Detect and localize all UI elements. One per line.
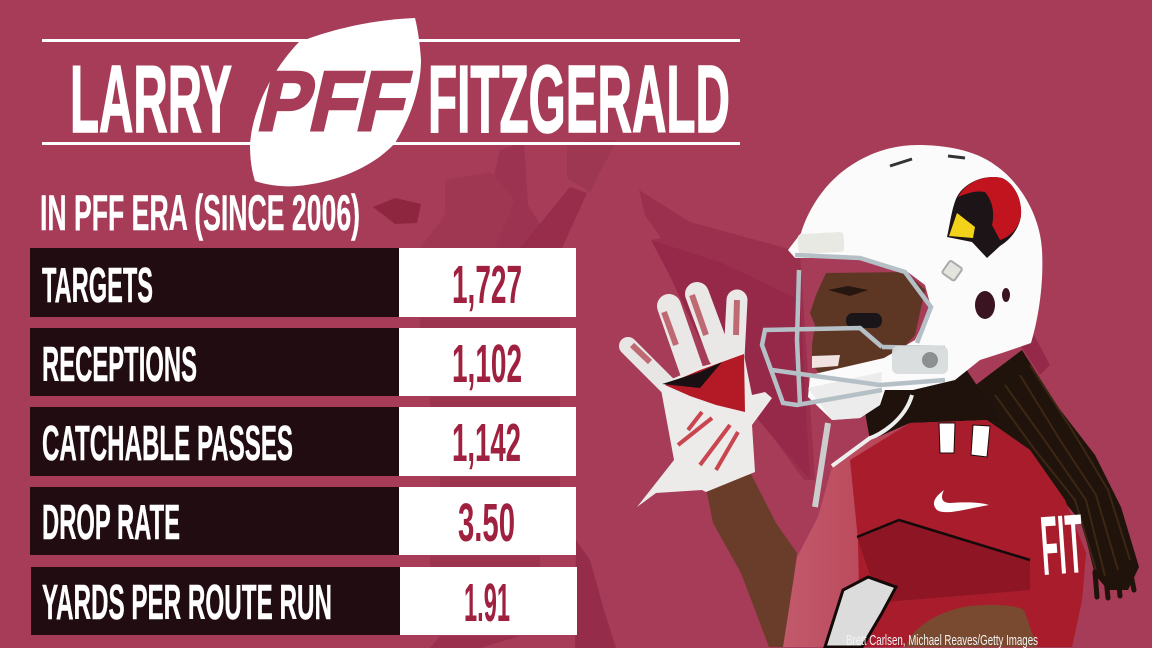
jaw pad xyxy=(808,372,882,420)
jersey seam xyxy=(857,520,1030,560)
mouth xyxy=(812,355,840,368)
stat row: yards per route run: YARDS PER ROUTE RUN xyxy=(42,576,332,630)
stat row: receptions xyxy=(30,328,576,396)
nike swoosh xyxy=(934,490,989,512)
bicep xyxy=(906,605,1037,647)
jersey xyxy=(783,420,1086,647)
forearm xyxy=(706,474,797,647)
facemask clip xyxy=(892,346,948,374)
subtitle: IN PFF ERA (SINCE 2006) xyxy=(40,185,360,241)
stat row: drop rate: 3.50 xyxy=(458,493,515,553)
helmet shell xyxy=(788,145,1042,420)
facemask xyxy=(762,255,945,405)
background wing logo xyxy=(639,190,1050,480)
helmet vents and snap xyxy=(890,156,1010,319)
jersey body red xyxy=(850,420,1086,647)
glove xyxy=(628,294,772,507)
stat row: targets: TARGETS xyxy=(42,259,153,313)
stat row: receptions: RECEPTIONS xyxy=(42,338,197,392)
text: LARRY xyxy=(70,46,232,153)
stat row: yards per route run: 1.91 xyxy=(464,573,510,633)
PFF football logo xyxy=(250,18,421,186)
stat row: targets: 1,727 xyxy=(452,255,522,315)
eye black xyxy=(846,313,882,328)
face xyxy=(810,272,925,385)
helmet front bumper xyxy=(798,232,844,254)
stat row: drop rate xyxy=(30,487,576,555)
title rule top xyxy=(42,39,740,42)
helmet logo xyxy=(947,177,1021,258)
text: FITZGERALD xyxy=(428,46,730,153)
sleeve name: FIT xyxy=(1038,498,1086,594)
neck xyxy=(860,360,1000,440)
stat row: drop rate: DROP RATE xyxy=(42,496,180,550)
stat row: receptions: 1,102 xyxy=(452,334,522,394)
sleeve shading xyxy=(857,520,1030,602)
hair xyxy=(973,350,1139,598)
undershirt panel xyxy=(825,577,896,647)
title rule bottom xyxy=(42,142,740,145)
PFF football logo: PFF xyxy=(251,55,418,149)
player photo illustration xyxy=(628,145,1139,647)
faint background player xyxy=(373,140,617,648)
chin strap xyxy=(832,395,912,466)
stat row: catchable passes: CATCHABLE PASSES xyxy=(42,417,293,471)
stat row: catchable passes: 1,142 xyxy=(452,413,521,473)
stat row: targets xyxy=(30,248,576,317)
eye xyxy=(828,286,868,296)
jersey number 11 xyxy=(939,423,990,457)
